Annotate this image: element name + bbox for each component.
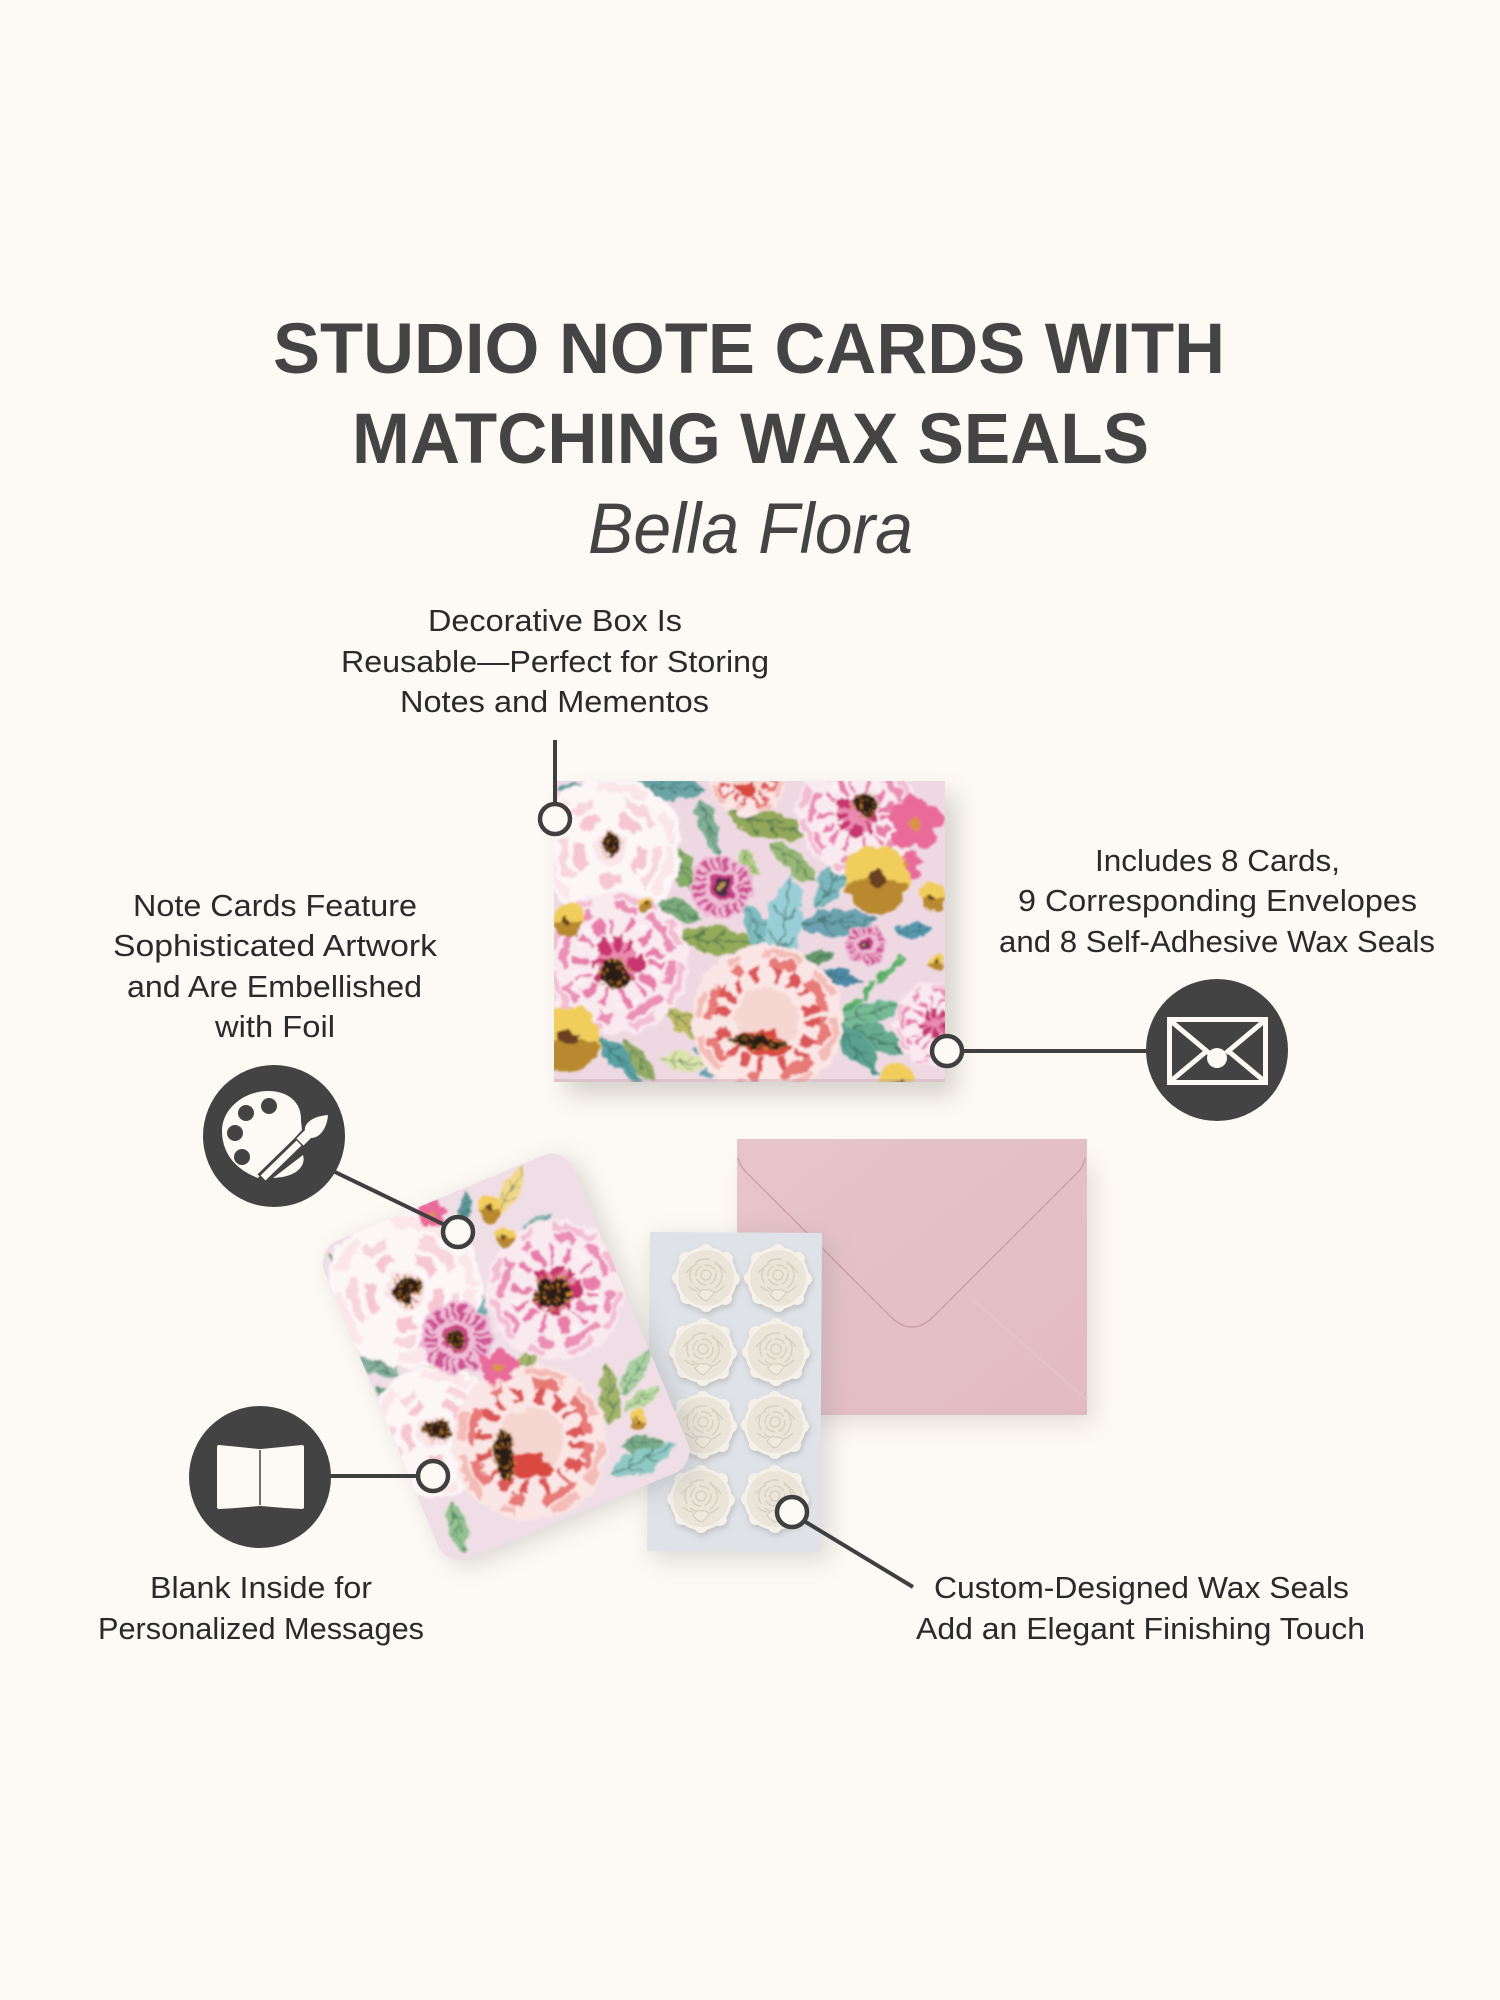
floral note card bbox=[322, 1153, 703, 1571]
title: MATCHING WAX SEALS bbox=[352, 400, 1149, 479]
infographic canvas bbox=[100, 322, 1434, 1646]
callout text: artwork and foil: with Foil bbox=[214, 1009, 335, 1044]
leader line: envelope icon bbox=[962, 1049, 1150, 1053]
callout text: blank inside bbox=[98, 1570, 424, 1646]
callout text: decorative box: Decorative Box Is bbox=[428, 603, 682, 638]
marker: box contents bbox=[932, 1036, 962, 1066]
title bbox=[273, 310, 1225, 479]
callout text: contents: and 8 Self-Adhesive Wax Seals bbox=[999, 924, 1435, 959]
decorative floral box bbox=[554, 781, 966, 1104]
title: STUDIO NOTE CARDS WITH bbox=[273, 310, 1225, 389]
marker: wax seal bbox=[777, 1497, 807, 1527]
leader line: wax seals bbox=[804, 1521, 913, 1587]
wax seal sheet bbox=[647, 1232, 830, 1560]
leader line: palette icon bbox=[335, 1172, 445, 1225]
callout text: wax seals: Custom-Designed Wax Seals bbox=[934, 1570, 1349, 1605]
callout text: decorative box: Notes and Mementos bbox=[400, 684, 709, 719]
icon: envelope bbox=[1146, 979, 1288, 1121]
marker: blank inside bbox=[418, 1461, 448, 1491]
callout text: contents bbox=[999, 843, 1435, 959]
callout text: blank inside: Personalized Messages bbox=[98, 1611, 424, 1646]
marker: decorative box bbox=[540, 804, 570, 834]
leader line: book icon bbox=[330, 1474, 418, 1478]
marker: artwork bbox=[443, 1217, 473, 1247]
subtitle: Bella Flora: Bella Flora bbox=[588, 490, 913, 569]
icon: artist palette and brush bbox=[203, 1065, 345, 1207]
icon: open book bbox=[189, 1406, 331, 1548]
callout text: wax seals: Add an Elegant Finishing Touch bbox=[916, 1611, 1365, 1646]
callout text: decorative box: Reusable—Perfect for Storing bbox=[341, 644, 769, 679]
pink envelope bbox=[737, 1139, 1093, 1423]
callout text: artwork and foil: and Are Embellished bbox=[127, 969, 422, 1004]
callout text: artwork and foil: Note Cards Feature bbox=[133, 888, 417, 923]
callout text: blank inside: Blank Inside for bbox=[150, 1570, 372, 1605]
callout text: artwork and foil: Sophisticated Artwork bbox=[113, 928, 438, 963]
eight wax seals bbox=[667, 1244, 812, 1533]
callout text: wax seals bbox=[916, 1570, 1365, 1646]
callout text: artwork and foil bbox=[113, 888, 438, 1044]
leader line: box top-left bbox=[553, 740, 557, 805]
callout text: contents: 9 Corresponding Envelopes bbox=[1018, 883, 1417, 918]
callout text: decorative box bbox=[341, 603, 769, 719]
callout text: contents: Includes 8 Cards, bbox=[1095, 843, 1340, 878]
